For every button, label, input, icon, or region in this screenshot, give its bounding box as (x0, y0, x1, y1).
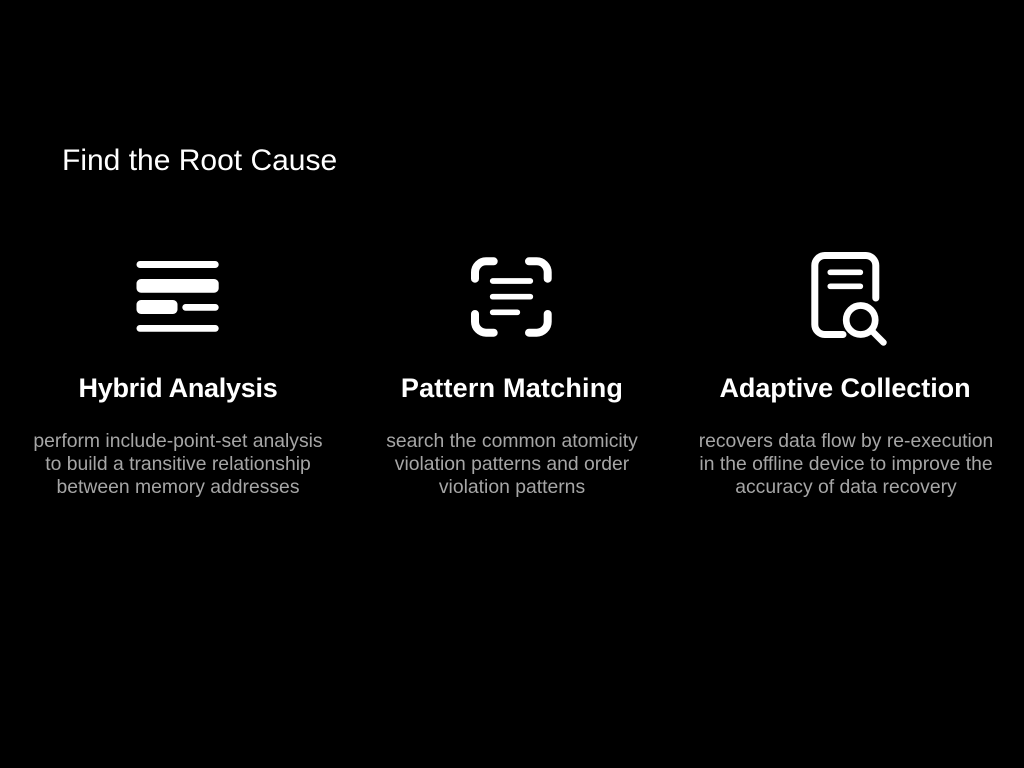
text: Adaptive Collection description: accuracy of data recovery (735, 476, 957, 498)
text: Pattern Matching description: search the common atomicity (386, 430, 638, 452)
text: Hybrid Analysis description: to build a transitive relationship (45, 453, 311, 475)
text: Adaptive Collection description (699, 430, 993, 498)
text: Pattern Matching description: violation patterns and order (395, 453, 629, 475)
icon: hybrid analysis text blocks (136, 261, 219, 332)
text: Hybrid Analysis description: between memory addresses (56, 476, 300, 498)
heading: Adaptive Collection: Adaptive Collection (719, 373, 971, 403)
icon: document with magnifier (811, 252, 887, 346)
heading: Hybrid Analysis: Hybrid Analysis (78, 373, 278, 403)
text: Hybrid Analysis description (33, 430, 323, 498)
heading: Pattern Matching: Pattern Matching (401, 373, 623, 403)
text: Hybrid Analysis description: perform include-point-set analysis (33, 430, 323, 452)
text: Adaptive Collection description: in the offline device to improve the (699, 453, 993, 475)
icon: scan frame with text lines (471, 257, 552, 337)
text: Pattern Matching description: violation patterns (439, 476, 585, 498)
text: Adaptive Collection description: recovers data flow by re-execution (699, 430, 993, 452)
title: Find the Root Cause (62, 144, 337, 177)
text: Pattern Matching description (386, 430, 638, 498)
